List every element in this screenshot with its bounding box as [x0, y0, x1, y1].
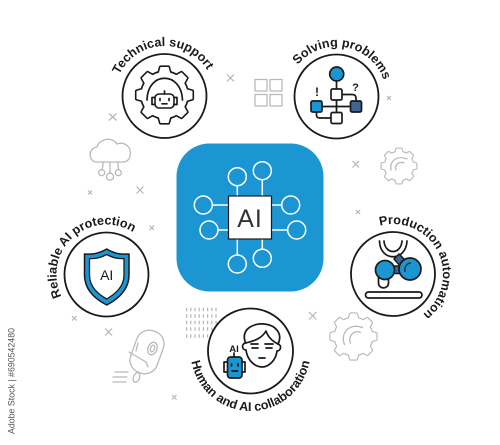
decorative cross marks	[72, 74, 401, 400]
circuit connectors	[194, 162, 306, 273]
icon: flow chart: ?	[352, 82, 359, 94]
stock credit text: Adobe Stock | #690542480	[6, 328, 16, 434]
circle	[64, 232, 148, 316]
circle	[122, 54, 206, 138]
blue rounded square	[176, 144, 324, 292]
panel: reliable AI protection	[47, 216, 150, 318]
curved label: Human and AI collaboration	[192, 360, 310, 411]
icon: human face	[243, 324, 281, 367]
icon: shield: AI	[100, 267, 113, 283]
panel: technical support	[112, 36, 214, 139]
icon: flow chart	[311, 67, 362, 124]
panel: human and AI collaboration	[192, 308, 310, 411]
panel: solving problems	[292, 40, 389, 140]
decorative icon: grey gear lower	[331, 314, 376, 359]
curved label: Solving problems	[292, 40, 389, 79]
icon: robot: AI	[229, 344, 239, 355]
decorative icon: grid of squares	[255, 80, 282, 106]
chip label: AI	[237, 205, 263, 233]
curved label: Technical support	[112, 36, 214, 72]
decorative icon: grey gear right	[382, 149, 416, 183]
curved label: Reliable AI protection	[47, 216, 135, 299]
icon: flow chart: !	[315, 85, 319, 99]
decorative icon: cloud network	[90, 139, 130, 180]
curved label: Production automation	[379, 216, 451, 318]
circle	[351, 232, 435, 316]
decorative icon: dotted texture	[186, 310, 218, 336]
central panel: AI chip	[176, 144, 324, 292]
icon: gear with robot	[136, 67, 192, 123]
decorative icon: robot mouse	[113, 327, 168, 383]
circle	[294, 54, 378, 138]
panel: production automation	[350, 216, 451, 318]
chip square	[228, 196, 272, 239]
icon: robotic arm	[366, 241, 422, 298]
circle	[208, 308, 293, 394]
